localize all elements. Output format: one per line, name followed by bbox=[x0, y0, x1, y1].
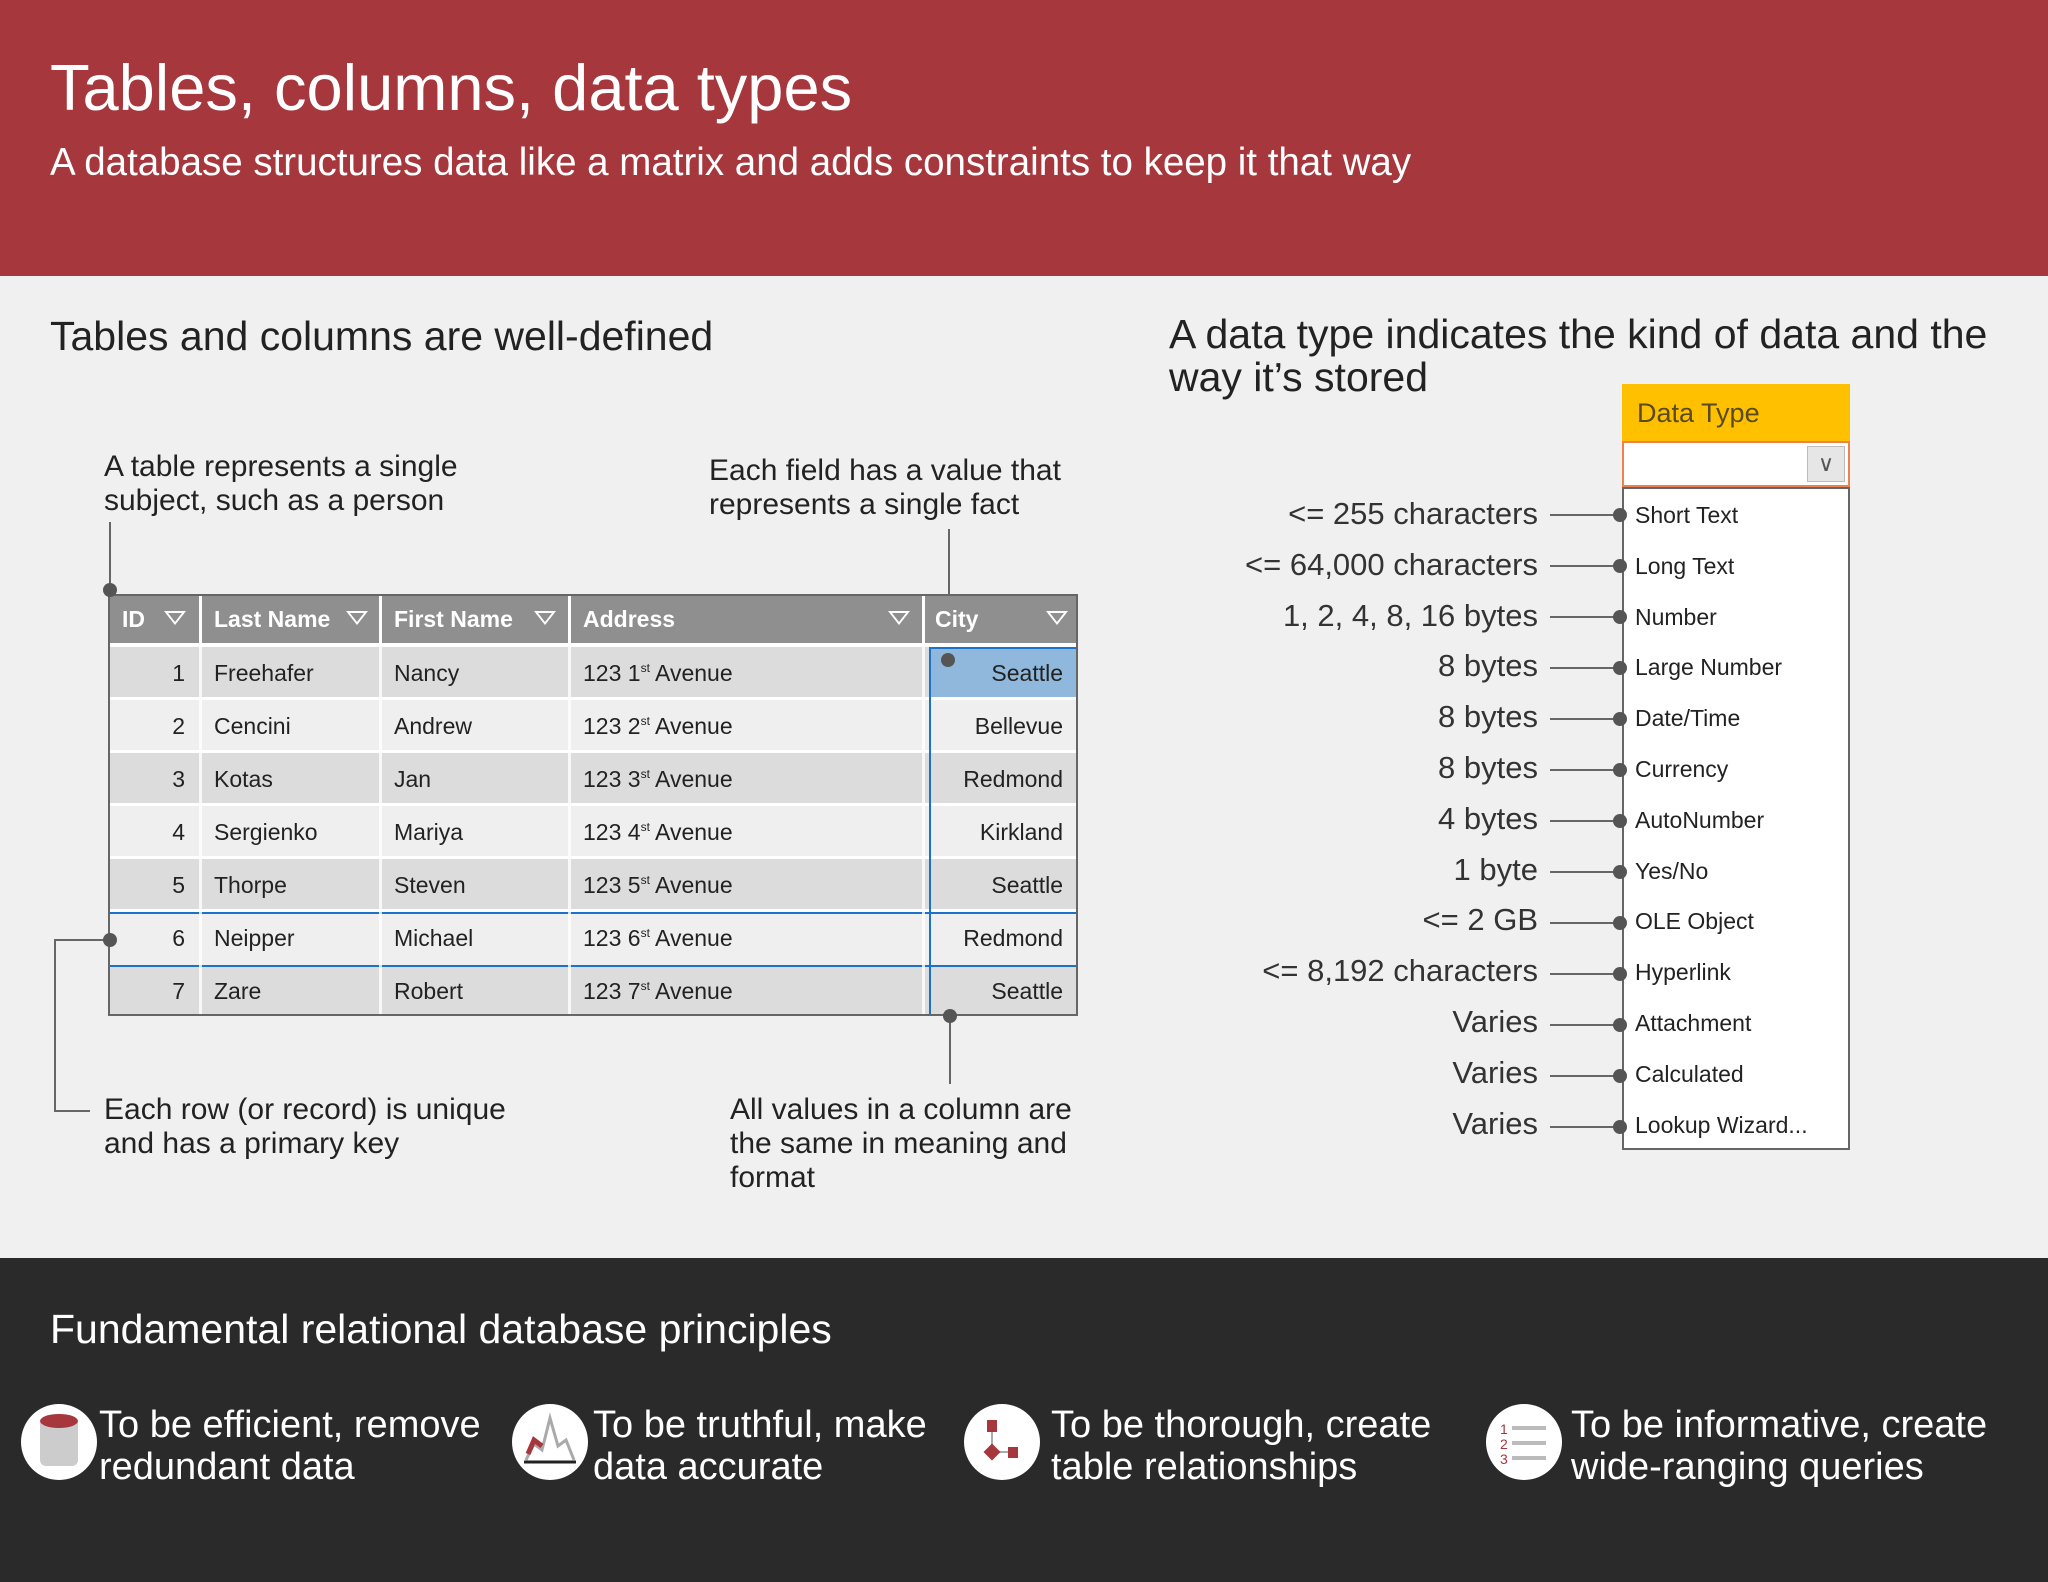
annotation: row bbox=[104, 1093, 506, 1160]
table cell text: 123 6st Avenue bbox=[583, 925, 733, 951]
principle 2: data accurate bbox=[593, 1446, 823, 1488]
annotation: field: Each field has a value that bbox=[709, 454, 1061, 487]
table cell text: Kirkland bbox=[980, 819, 1063, 845]
table cell text: 6 bbox=[172, 925, 185, 951]
table cell text: 123 5st Avenue bbox=[583, 872, 733, 898]
principle 3: To be thorough, create bbox=[1051, 1404, 1431, 1446]
text: Long Text bbox=[1635, 553, 1734, 579]
text: Calculated bbox=[1635, 1061, 1744, 1087]
heading: tables: Tables and columns are well-defined bbox=[50, 313, 713, 359]
footer heading: Fundamental relational database principles bbox=[50, 1306, 832, 1352]
annotation: column: the same in meaning and bbox=[730, 1127, 1067, 1160]
size labels: Varies bbox=[1452, 1004, 1538, 1039]
size labels: <= 255 characters bbox=[1288, 496, 1538, 531]
size labels: 8 bytes bbox=[1438, 750, 1538, 785]
annotation: field bbox=[709, 454, 1061, 521]
principle 4: wide-ranging queries bbox=[1571, 1446, 1924, 1488]
table cell text: Sergienko bbox=[214, 819, 318, 845]
text: OLE Object bbox=[1635, 908, 1754, 934]
table rows bbox=[110, 647, 1076, 1014]
table cell text: Freehafer bbox=[214, 660, 314, 686]
table cell text: Nancy bbox=[394, 660, 459, 686]
principle 3 bbox=[964, 1404, 1431, 1488]
size labels: <= 64,000 characters bbox=[1245, 547, 1538, 582]
annotation: field: represents a single fact bbox=[709, 488, 1019, 521]
annotation: row: Each row (or record) is unique bbox=[104, 1093, 506, 1126]
size labels: 8 bytes bbox=[1438, 648, 1538, 683]
text: Yes/No bbox=[1635, 858, 1708, 884]
size labels: 8 bytes bbox=[1438, 699, 1538, 734]
table header: Address bbox=[583, 606, 675, 632]
table cell text: 123 7st Avenue bbox=[583, 978, 733, 1004]
table cell text: 3 bbox=[172, 766, 185, 792]
size labels: <= 8,192 characters bbox=[1262, 953, 1538, 988]
table cell text: 2 bbox=[172, 713, 185, 739]
table cell text: 4 bbox=[172, 819, 185, 845]
heading: data types: way it’s stored bbox=[1169, 354, 1428, 400]
principle 1 bbox=[21, 1404, 481, 1488]
heading: data types bbox=[1169, 311, 1987, 400]
table cell text: Neipper bbox=[214, 925, 295, 951]
table cell text bbox=[172, 660, 1063, 1004]
table cell text: 123 1st Avenue bbox=[583, 660, 733, 686]
annotation: table subject: A table represents a single bbox=[104, 450, 458, 483]
size labels bbox=[1245, 496, 1538, 1141]
data type dropdown: ∨ bbox=[1818, 451, 1834, 476]
annotation: column bbox=[730, 1093, 1072, 1194]
annotation: table subject bbox=[104, 450, 458, 517]
text: Large Number bbox=[1635, 654, 1782, 680]
table cell text: Seattle bbox=[991, 872, 1063, 898]
table cell text: Andrew bbox=[394, 713, 472, 739]
text: Short Text bbox=[1635, 502, 1738, 528]
annotation: table subject: subject, such as a person bbox=[104, 484, 444, 517]
table header bbox=[110, 596, 1076, 643]
table cell text: Zare bbox=[214, 978, 261, 1004]
title: Tables, columns, data types bbox=[50, 51, 852, 124]
table cell text: 5 bbox=[172, 872, 185, 898]
size labels: <= 2 GB bbox=[1423, 902, 1538, 937]
table header: Last Name bbox=[214, 606, 330, 632]
text: AutoNumber bbox=[1635, 807, 1764, 833]
table cell text: Thorpe bbox=[214, 872, 287, 898]
table cell text: 123 2st Avenue bbox=[583, 713, 733, 739]
data type dropdown bbox=[1622, 384, 1850, 1150]
table cell text: Jan bbox=[394, 766, 431, 792]
principle 1: redundant data bbox=[99, 1446, 355, 1488]
annotation: column: All values in a column are bbox=[730, 1093, 1072, 1126]
heading: data types: A data type indicates the kind of data and the bbox=[1169, 311, 1987, 357]
annotation: row: and has a primary key bbox=[104, 1127, 399, 1160]
table cell text: Redmond bbox=[963, 925, 1063, 951]
connector dots bbox=[103, 583, 957, 1023]
principle 4: 1 bbox=[1500, 1421, 1508, 1437]
data type dropdown: Data Type bbox=[1637, 398, 1760, 428]
table cell text: Michael bbox=[394, 925, 473, 951]
connector lines bbox=[54, 522, 951, 1112]
principle 4: To be informative, create bbox=[1571, 1404, 1987, 1446]
table cell text: Redmond bbox=[963, 766, 1063, 792]
table cell text: Steven bbox=[394, 872, 466, 898]
text: Date/Time bbox=[1635, 705, 1740, 731]
principle 1: To be efficient, remove bbox=[99, 1404, 481, 1446]
footer panel bbox=[0, 1258, 2048, 1582]
table header: ID bbox=[122, 606, 145, 632]
size labels: Varies bbox=[1452, 1055, 1538, 1090]
text: Lookup Wizard... bbox=[1635, 1112, 1808, 1138]
table cell text: 7 bbox=[172, 978, 185, 1004]
table cell text: Kotas bbox=[214, 766, 273, 792]
size labels: 1, 2, 4, 8, 16 bytes bbox=[1283, 598, 1538, 633]
text: Attachment bbox=[1635, 1010, 1751, 1036]
data type list items bbox=[1550, 508, 1627, 1134]
table cell text: 1 bbox=[172, 660, 185, 686]
header banner bbox=[0, 0, 2048, 276]
table cell text: Seattle bbox=[991, 660, 1063, 686]
annotation: column: format bbox=[730, 1161, 815, 1194]
principle 4: 2 bbox=[1500, 1436, 1508, 1452]
table cell text: Mariya bbox=[394, 819, 463, 845]
table header: City bbox=[935, 606, 978, 632]
subtitle: A database structures data like a matrix and adds constraints to keep it that way bbox=[50, 141, 1411, 184]
table cell text: Bellevue bbox=[975, 713, 1063, 739]
text: Number bbox=[1635, 604, 1717, 630]
size labels: Varies bbox=[1452, 1106, 1538, 1141]
table cell text: 123 4st Avenue bbox=[583, 819, 733, 845]
principle 3: table relationships bbox=[1051, 1446, 1357, 1488]
text: Currency bbox=[1635, 756, 1728, 782]
data table bbox=[108, 594, 1078, 1016]
principle 2: To be truthful, make bbox=[593, 1404, 927, 1446]
text: Hyperlink bbox=[1635, 959, 1731, 985]
table cell text: Seattle bbox=[991, 978, 1063, 1004]
size labels: 1 byte bbox=[1454, 852, 1538, 887]
table cell text: 123 3st Avenue bbox=[583, 766, 733, 792]
principle 4: 3 bbox=[1500, 1451, 1508, 1467]
size labels: 4 bytes bbox=[1438, 801, 1538, 836]
principle 4 bbox=[1486, 1404, 1987, 1488]
principle 2 bbox=[512, 1404, 927, 1488]
table header: First Name bbox=[394, 606, 513, 632]
table cell text: Cencini bbox=[214, 713, 291, 739]
table cell text: Robert bbox=[394, 978, 463, 1004]
